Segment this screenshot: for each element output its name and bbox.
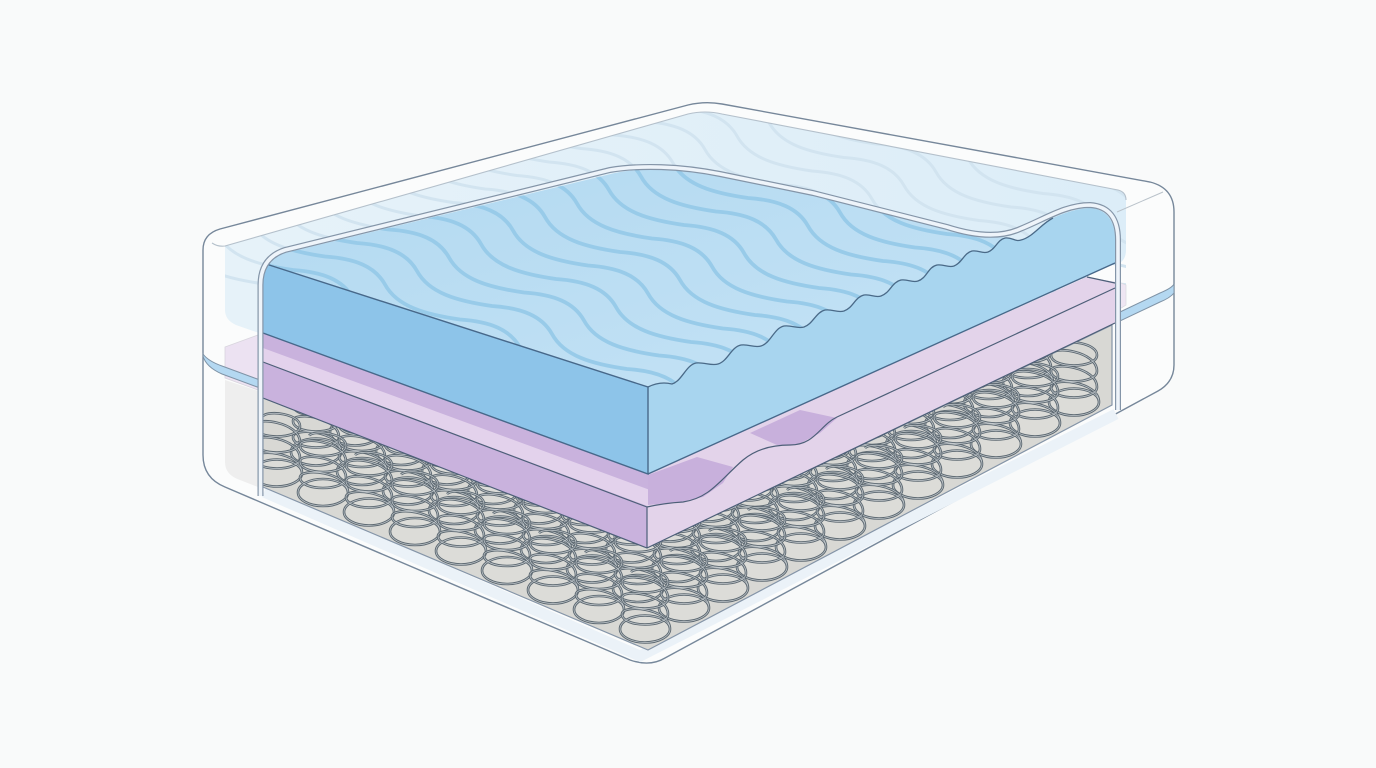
foam right face [648,208,1115,474]
ghost spring layer left [225,380,258,487]
ghost back layers seen through cover [212,112,1164,486]
ghost wave lines [225,112,1126,292]
foam ripple edge [648,218,1053,387]
purple right face and top [647,277,1115,548]
ghost foam top edge [212,112,1126,246]
purple dark patch two [750,410,837,445]
purple light stripe [263,348,650,507]
foam top face [263,169,1040,400]
cutaway window frame [260,167,1118,496]
coil springs [264,342,1100,644]
purple comfort layer [263,277,1115,548]
ghost right corner line [1117,192,1163,212]
purple dark patch one [648,457,733,505]
seam piping left [203,354,260,388]
foam left face [263,263,648,474]
foam wave lines [270,170,995,384]
blue foam layer [262,170,1115,475]
outer mattress cover shell [203,103,1174,663]
ghost foam layer [225,112,1126,334]
seam piping right [1120,284,1174,321]
foam front edges [263,263,1115,474]
spring layer base [263,325,1112,650]
illustration: mattress cutaway [202,102,1175,664]
purple edge lines [263,277,1115,548]
ghost purple layer left [225,335,258,390]
purple left face and top band [263,277,1115,548]
ghost purple layer right [1118,282,1126,310]
bottom cover band [264,414,1116,656]
